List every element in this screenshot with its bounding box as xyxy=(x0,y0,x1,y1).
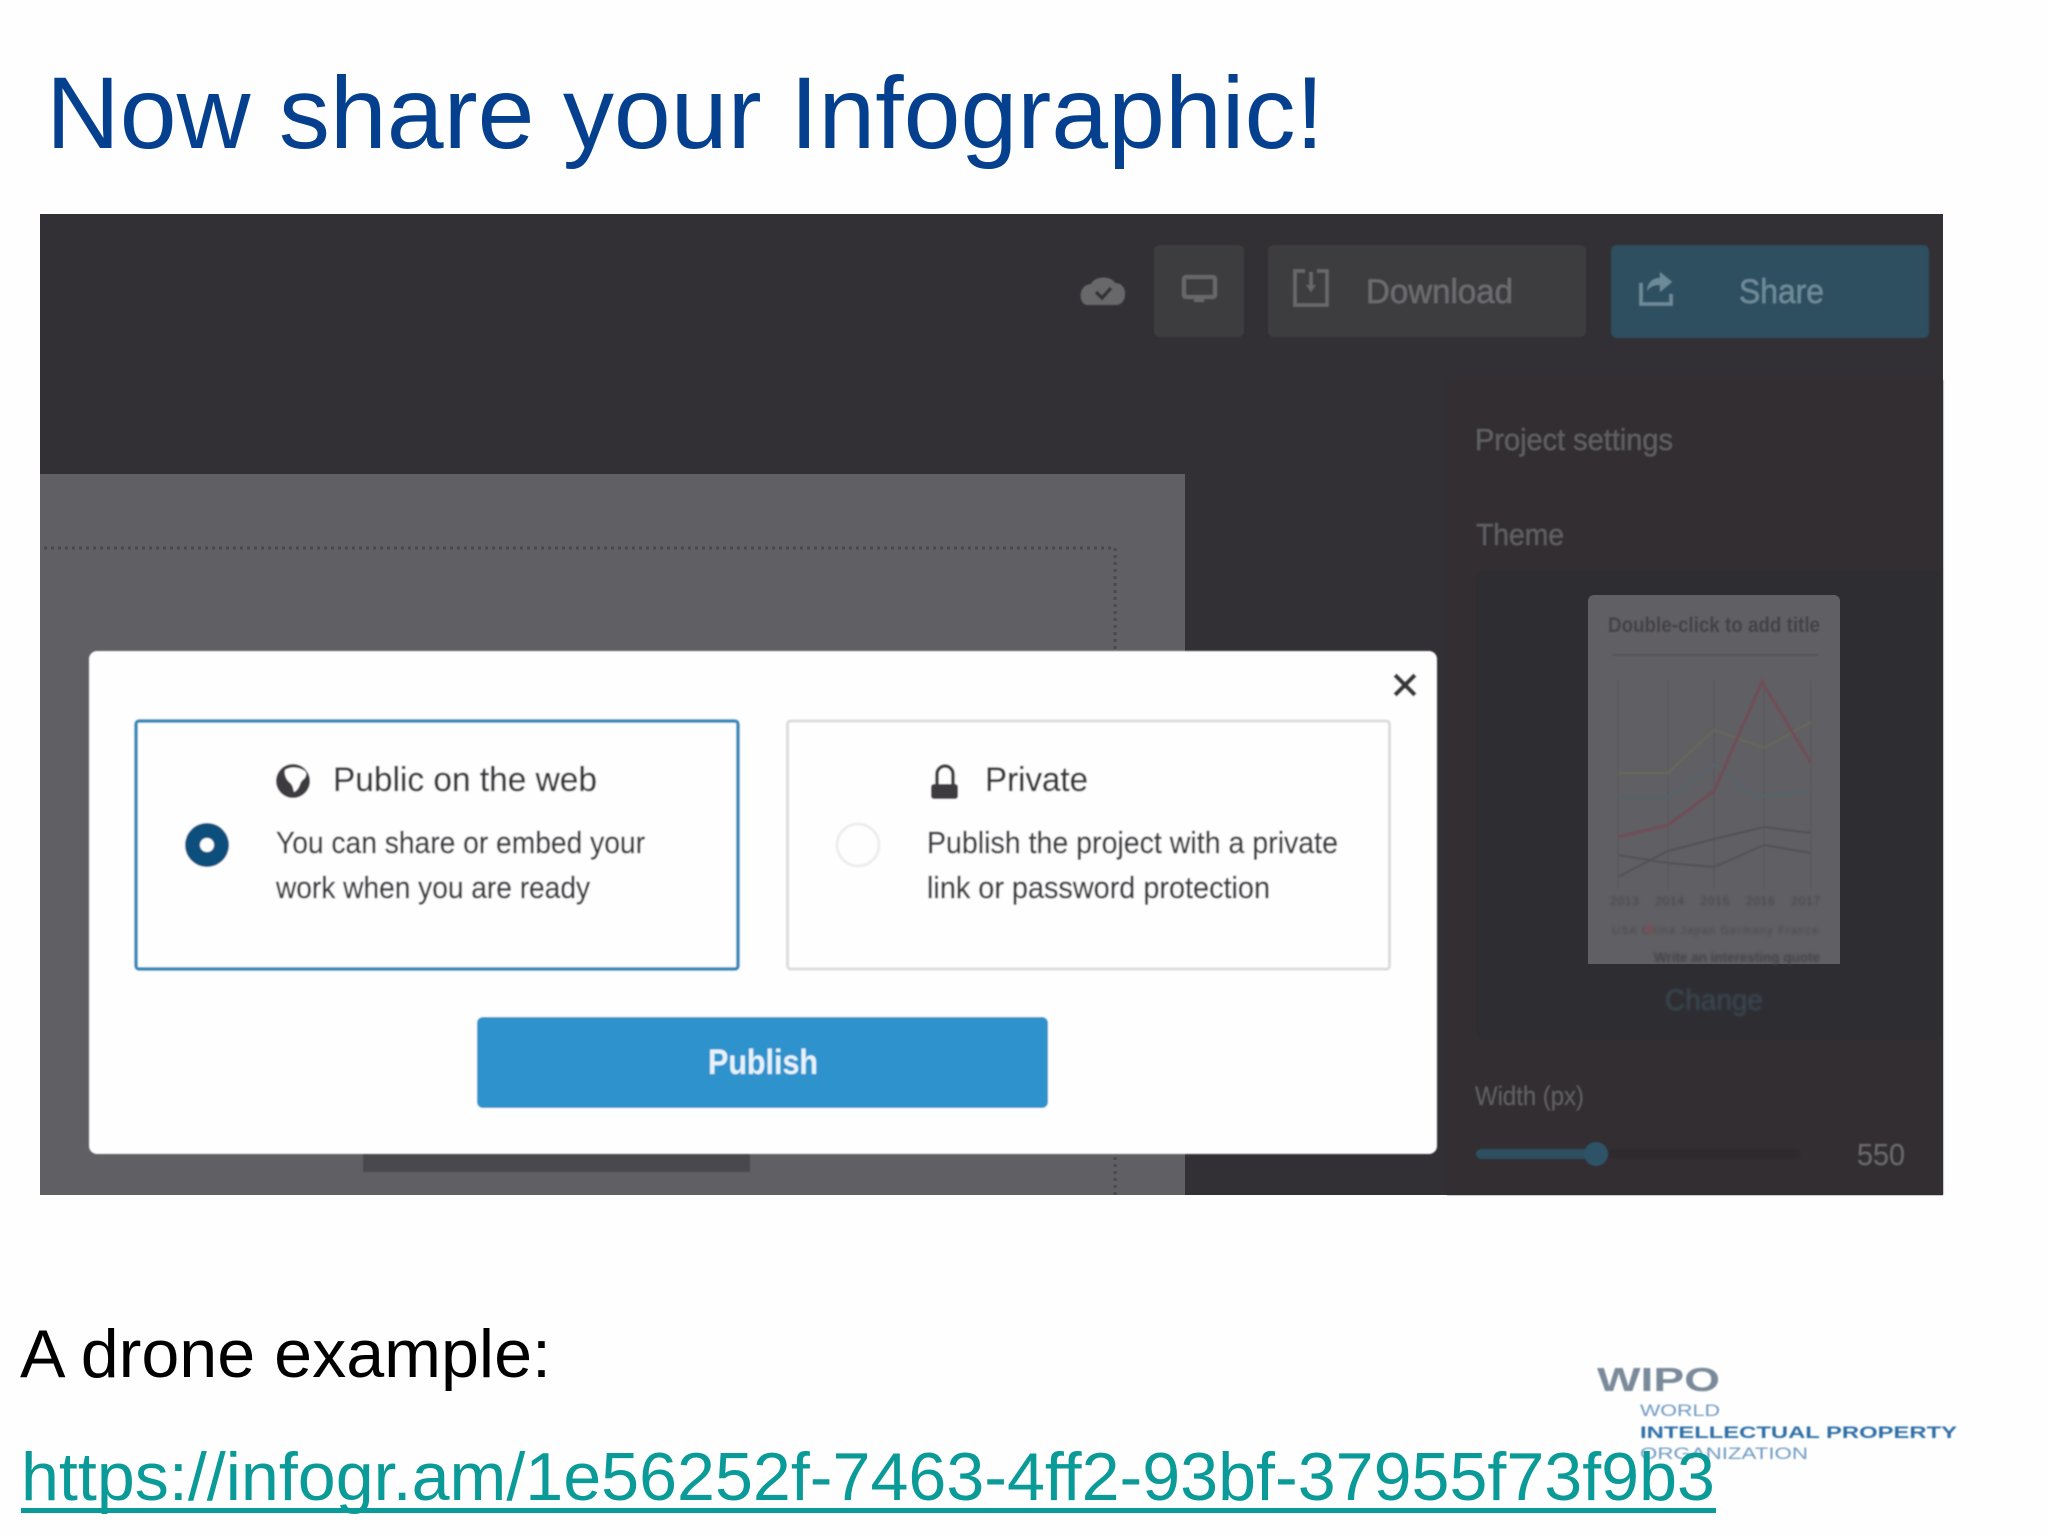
text: a drone example: A drone example: xyxy=(20,1316,551,1392)
button: publish xyxy=(477,1017,1048,1108)
value: 550: 550 xyxy=(1857,1137,1905,1172)
label: width: Width (px) xyxy=(1475,1081,1584,1111)
heading: project settings: Project settings xyxy=(1475,422,1673,457)
radio selected xyxy=(185,823,229,867)
chart: theme preview thumbnail: Write an interesting quote xyxy=(1654,949,1820,965)
chart: theme preview thumbnail: Double-click to add title xyxy=(1608,614,1820,637)
button: share: Share xyxy=(1739,273,1824,311)
button: download xyxy=(1268,245,1586,337)
button: preview xyxy=(1154,245,1244,337)
card: private: link or password protection xyxy=(927,870,1270,905)
chart line: red series xyxy=(1618,682,1811,837)
title: Now share your Infographic! xyxy=(46,56,1324,170)
chart line: grey series one xyxy=(1618,827,1811,877)
radio unselected xyxy=(837,824,879,866)
description: public: You can share or embed your xyxy=(276,825,645,860)
logo: WIPO xyxy=(1597,1361,1958,1463)
heading: public on the web: Public on the web xyxy=(333,761,597,799)
card: public on the web: work when you are ready xyxy=(275,870,590,905)
chart: theme preview thumbnail: 2013 2014 2015 2016 2017 xyxy=(1610,894,1820,908)
heading: theme: Theme xyxy=(1476,517,1564,552)
logo: WIPO: WORLD xyxy=(1640,1401,1720,1420)
link: change theme: Change xyxy=(1665,984,1763,1017)
panel: dimmed editor screenshot xyxy=(40,214,1943,1195)
card: private xyxy=(788,721,1390,969)
panel: publish dialog xyxy=(89,651,1437,1154)
button: download: Download xyxy=(1366,273,1513,311)
logo: WIPO: WIPO xyxy=(1597,1361,1720,1398)
heading: private: Private xyxy=(985,761,1088,799)
icon: close xyxy=(1395,675,1415,695)
logo: WIPO: INTELLECTUAL PROPERTY xyxy=(1640,1423,1958,1442)
panel: canvas area xyxy=(40,474,1185,1195)
chart line: grey series two xyxy=(1618,845,1811,867)
chart: theme preview thumbnail: USA China Japan Germany France xyxy=(1612,925,1818,937)
icon: lock xyxy=(931,766,958,799)
description: private: Publish the project with a private xyxy=(927,825,1338,860)
width setting xyxy=(1475,1081,1905,1172)
icon: cloud saved xyxy=(1081,277,1125,305)
link: example url: https://infogr.am/1e56252f-7463-4ff2-93bf-37955f73f9b3 xyxy=(21,1439,1715,1515)
chart line: teal series xyxy=(1618,765,1811,797)
icon: globe xyxy=(276,764,310,798)
button: publish: Publish xyxy=(708,1043,818,1082)
button: share xyxy=(1611,245,1929,338)
chart line: yellow series xyxy=(1618,722,1811,773)
sidebar: project settings xyxy=(1447,380,1943,1195)
card: public on the web xyxy=(136,721,738,969)
slider xyxy=(1476,1142,1801,1166)
logo: WIPO: ORGANIZATION xyxy=(1640,1444,1808,1463)
chart: theme preview thumbnail xyxy=(1588,595,1840,965)
